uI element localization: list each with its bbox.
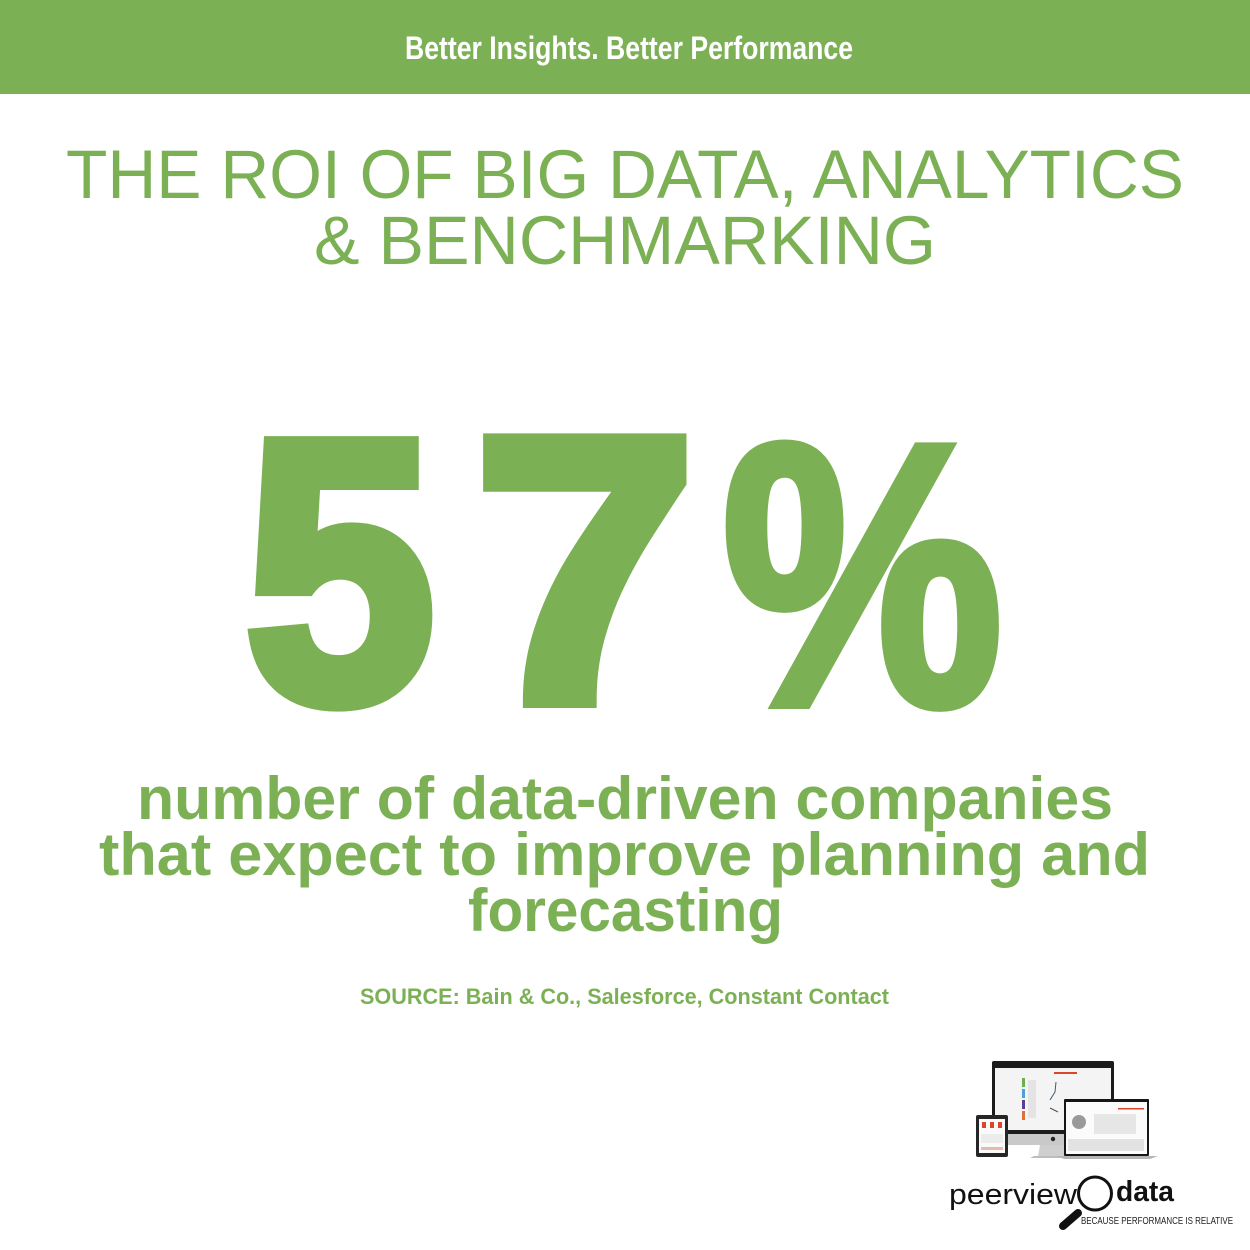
logo: wordmark [949,1176,1233,1227]
big statistic: 57%: 7 [474,360,696,780]
header banner [0,0,1250,94]
statistic description [99,765,1150,944]
icon: desktop monitor [992,1061,1114,1158]
icon: laptop [1056,1099,1158,1159]
icon: tablet [976,1115,1008,1157]
source line: SOURCE: Bain & Co., Salesforce, Constant Contact [360,984,890,1009]
logo: wordmark: peerview [949,1179,1078,1211]
big statistic: 57% [246,360,1003,784]
statistic description: that expect to improve planning and [99,821,1150,888]
statistic description: forecasting [468,877,783,944]
statistic description: number of data-driven companies [137,765,1113,832]
logo: wordmark: data [1116,1176,1175,1208]
big statistic: 57%: 5 [246,363,434,779]
title: THE ROI OF BIG DATA, ANALYTICS [66,136,1184,213]
title [66,136,1184,279]
header banner: Better Insights. Better Performance [405,30,853,66]
logo: device illustration [976,1061,1158,1159]
title: & BENCHMARKING [314,202,936,279]
big statistic: 57%: % [722,367,1003,784]
icon: magnifying glass [1063,1177,1112,1226]
